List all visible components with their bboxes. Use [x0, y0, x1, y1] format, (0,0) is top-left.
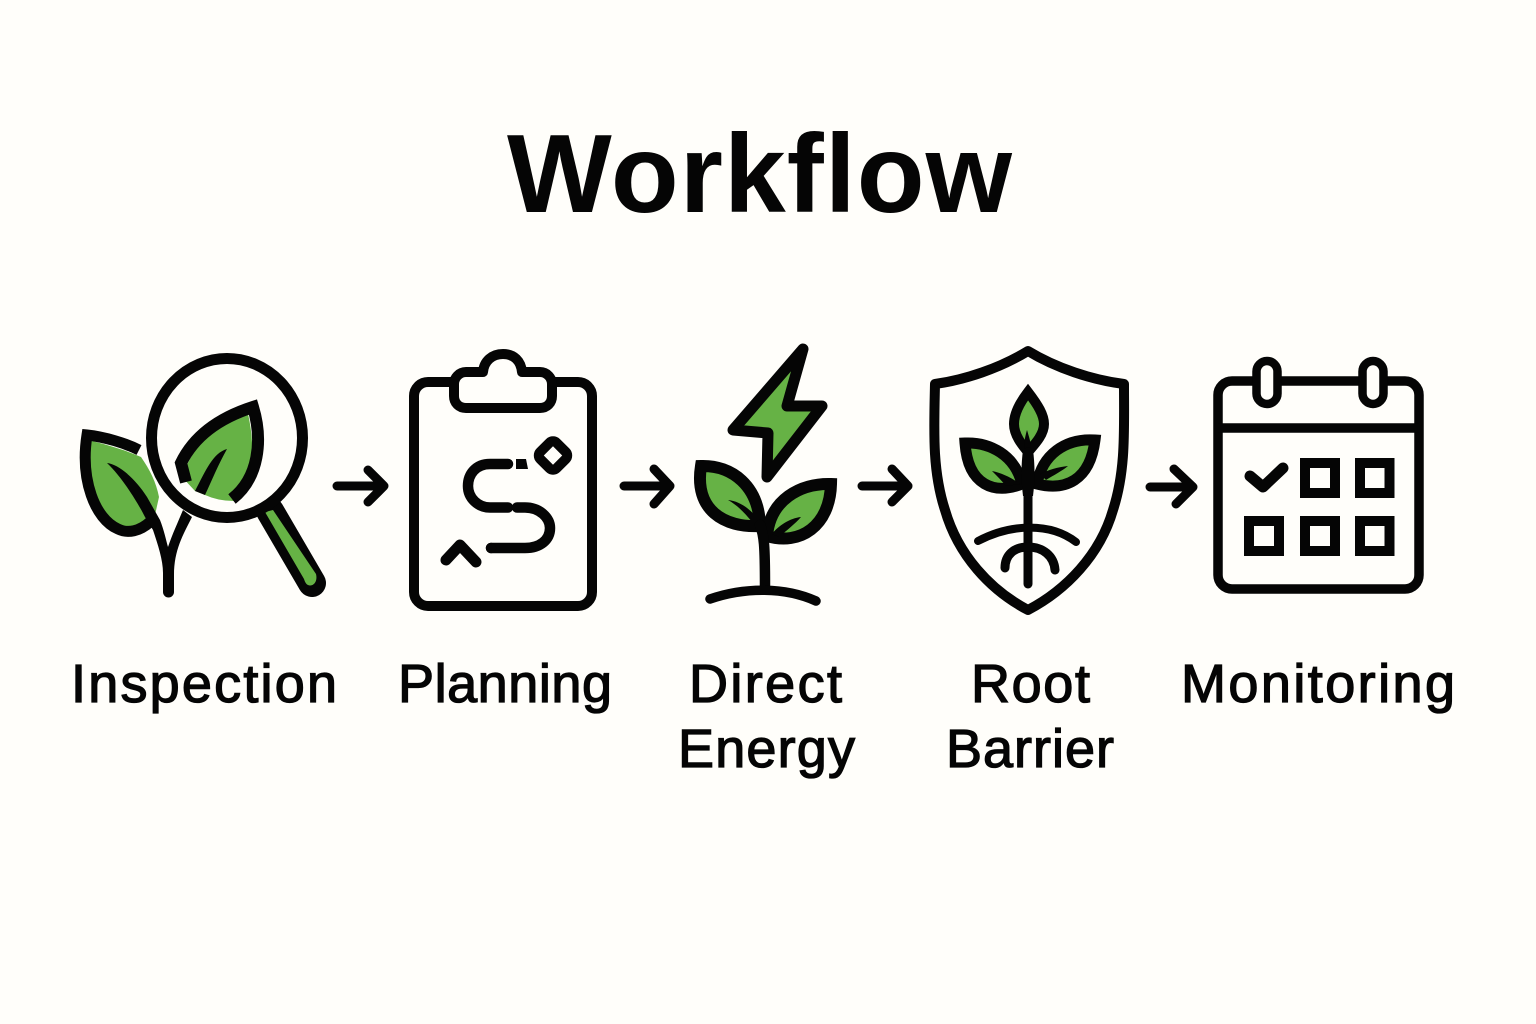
arrow: root barrier to monitoring [1150, 469, 1193, 504]
label: root barrier [946, 654, 1114, 779]
label: direct energy: Energy [678, 719, 855, 779]
label: monitoring: Monitoring [1181, 654, 1455, 714]
icon: monitoring calendar [1218, 361, 1419, 589]
label: inspection: Inspection [71, 654, 337, 714]
arrow: inspection to planning [337, 470, 384, 502]
title: Workflow [507, 112, 1013, 236]
icon: root barrier shield [934, 351, 1124, 610]
icon: direct energy bolt and sprout [700, 349, 831, 601]
arrow: planning to direct energy [624, 469, 670, 504]
label: root barrier: Barrier [946, 719, 1114, 779]
label: root barrier: Root [971, 654, 1090, 714]
icon: inspection magnifier over plant [85, 358, 316, 598]
label: direct energy: Direct [689, 654, 842, 714]
icon: planning clipboard [414, 354, 592, 606]
label: direct energy [678, 654, 855, 779]
arrow: direct energy to root barrier [862, 469, 908, 502]
label: planning: Planning [398, 654, 612, 714]
